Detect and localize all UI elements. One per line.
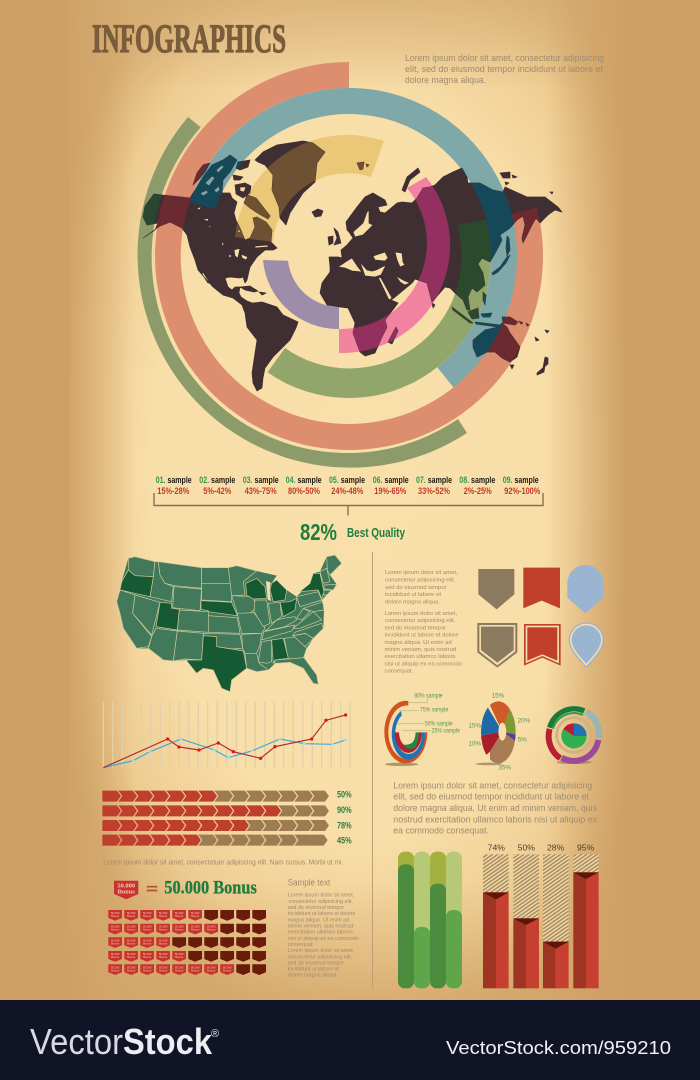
blue series xyxy=(103,738,347,768)
sample 07 xyxy=(416,475,452,497)
bar row 78% xyxy=(102,820,329,831)
red filled badges: Bonus xyxy=(127,914,136,918)
sample 08 xyxy=(459,475,495,497)
red filled badges: 50.000 xyxy=(207,925,216,929)
badges and shields xyxy=(477,565,604,668)
red filled badges: Bonus xyxy=(127,968,136,972)
sample text block: consectetur adipisicing elit, xyxy=(288,899,353,905)
red filled badges: Bonus xyxy=(159,955,168,959)
red filled badges: 50.000 xyxy=(159,965,168,969)
vertical divider xyxy=(372,552,374,988)
sample text block: incididunt ut labore et xyxy=(288,967,339,973)
lower right text block: elit, sed do eiusmod tempor incididunt ut labore et xyxy=(393,792,590,802)
best quality callout xyxy=(300,519,405,545)
pictogram grid xyxy=(108,910,266,975)
sample text block: Lorem ipsum dolor sit amet, xyxy=(288,948,355,954)
sample text block: dolore magna aliqua. xyxy=(288,973,338,979)
red filled badges: Bonus xyxy=(159,928,168,932)
footer logo xyxy=(30,1021,219,1062)
red filled badges: Bonus xyxy=(191,928,200,932)
red filled badges: Bonus xyxy=(111,928,120,932)
sample 08: 2%-25% xyxy=(464,486,492,497)
footer bar xyxy=(0,1000,700,1080)
red filled badges: 50.000 xyxy=(175,911,184,915)
sample text block: sed do eiusmod tempor xyxy=(288,960,344,966)
column back tops xyxy=(398,852,462,988)
sample 01: 15%-28% xyxy=(157,486,190,497)
sample 05: 24%-48% xyxy=(331,486,364,497)
sample 06: 19%-65% xyxy=(374,486,407,497)
3D pie donut: 20% xyxy=(518,717,531,724)
red filled badges: Bonus xyxy=(191,914,200,918)
badge: red outlined ribbon xyxy=(524,624,561,666)
equals sign xyxy=(147,887,157,890)
intro text: elit, sed do eiusmod tempor incididunt ut labore et xyxy=(405,64,603,74)
red filled badges: Bonus xyxy=(127,928,136,932)
column 50%: 50% xyxy=(518,843,535,852)
sample text block: sed do eiusmod tempor xyxy=(288,905,344,911)
best quality callout: 82% xyxy=(300,519,337,545)
sample text block: consequat. xyxy=(288,942,314,948)
sample 02: 02. sample xyxy=(199,475,235,486)
text block: badges intro: exercitation ullamco laboris xyxy=(384,654,456,660)
footer logo: Stock xyxy=(123,1021,213,1062)
sample 09: 92%-100% xyxy=(504,486,541,497)
sample text block: exercitation ullamco laboris xyxy=(288,930,353,936)
sample 03 xyxy=(243,475,279,497)
footer logo: ® xyxy=(211,1028,219,1040)
sample text block xyxy=(288,878,359,979)
column fronts xyxy=(398,864,462,988)
red filled badges: 50.000 xyxy=(159,952,168,956)
3D arc donut: 25% sample xyxy=(432,727,460,734)
sample 07: 33%-52% xyxy=(418,486,450,497)
red filled badges: Bonus xyxy=(127,941,136,945)
sample 01 xyxy=(156,475,192,497)
red filled badges: 50.000 xyxy=(143,938,152,942)
text block: badges intro: magna aliqua. Ut enim ad xyxy=(384,640,452,646)
badge: red ribbon xyxy=(523,568,560,608)
3D arc donut: 75% sample xyxy=(420,707,449,714)
red filled badges: 50.000 xyxy=(111,952,120,956)
sample text block: nisi ut aliquip ex ea commodo xyxy=(288,936,359,942)
sample 05: 05. sample xyxy=(329,475,365,486)
sample 07: 07. sample xyxy=(416,475,452,486)
bar percentages: 78% xyxy=(337,820,352,830)
red filled badges: 50.000 xyxy=(111,965,120,969)
sample 04: 80%-50% xyxy=(288,486,320,497)
intro text: Lorem ipsum dolor sit amet, consectetur adipisicing xyxy=(405,53,604,63)
column 74% xyxy=(483,843,509,988)
dark empty badges xyxy=(172,910,266,975)
red filled badges: Bonus xyxy=(207,928,216,932)
red series xyxy=(103,713,347,768)
red filled badges: Bonus xyxy=(143,955,152,959)
icon: bonus badge xyxy=(114,881,138,899)
bar row 90% xyxy=(102,805,329,816)
red filled badges: 50.000 xyxy=(223,965,232,969)
3D pie donut: 10% xyxy=(468,741,481,748)
world map silhouette xyxy=(143,141,562,391)
badge: blue outlined drop xyxy=(569,622,604,668)
red filled badges: 50.000 xyxy=(191,925,200,929)
red filled badges: Bonus xyxy=(207,968,216,972)
text block: badges intro: incididunt ut labore et dolore xyxy=(384,633,459,639)
badge: brown shield xyxy=(478,569,514,609)
text block: badges intro: sed do eiusmod tempor xyxy=(385,585,447,591)
bar percentages xyxy=(337,790,352,845)
red filled badges: 50.000 xyxy=(143,911,152,915)
3D arc donut: 50% sample xyxy=(425,720,453,727)
text block: badges intro: consectetur adipisicing elit, xyxy=(385,618,456,624)
red filled badges: Bonus xyxy=(159,941,168,945)
3D pie donut xyxy=(468,692,531,771)
text block: badges intro: incididunt ut labore et xyxy=(385,592,441,598)
line chart xyxy=(103,702,350,768)
ring overlaps on map xyxy=(143,142,540,362)
sample text block: Sample text xyxy=(288,878,331,888)
sample 04 xyxy=(286,475,322,497)
icon: bonus badge: 50.000 xyxy=(117,882,135,890)
column 74%: 74% xyxy=(488,843,505,852)
red filled badges: 50.000 xyxy=(207,965,216,969)
red filled badges: 50.000 xyxy=(143,952,152,956)
green column chart xyxy=(398,852,462,988)
legend bracket xyxy=(154,493,543,516)
red filled badges: Bonus xyxy=(175,968,184,972)
column 95%: 95% xyxy=(577,843,594,852)
USA choropleth map xyxy=(117,555,342,692)
column 28% xyxy=(543,843,569,988)
text block: badges intro xyxy=(384,570,463,675)
red filled badges: 50.000 xyxy=(127,938,136,942)
sample 03: 03. sample xyxy=(243,475,279,486)
text block: badges intro: consectetur adipisicing elit, xyxy=(385,578,456,584)
sample 04: 04. sample xyxy=(286,475,322,486)
red filled badges: 50.000 xyxy=(159,938,168,942)
red filled badges: Bonus xyxy=(143,914,152,918)
bar percentages: 45% xyxy=(337,835,352,845)
intro text xyxy=(405,53,604,85)
red filled badges: 50.000 xyxy=(175,952,184,956)
red filled badges: 50.000 xyxy=(111,925,120,929)
lower right text block: dolore magna aliqua. Ut enim ad minim veniam, quis xyxy=(393,803,598,813)
red filled badges: Bonus xyxy=(111,955,120,959)
red filled badges: Bonus xyxy=(111,914,120,918)
ring and pie donut xyxy=(549,709,599,764)
red filled badges: Bonus xyxy=(111,941,120,945)
text block: badges intro: nisi ut aliquip ex ea commodo xyxy=(384,661,463,667)
column 95% xyxy=(573,843,599,988)
badge: brown outlined shield xyxy=(477,623,517,668)
chevron progress bars xyxy=(102,790,352,846)
sample 08: 08. sample xyxy=(459,475,495,486)
red filled badges: Bonus xyxy=(175,914,184,918)
3D pie donut: 5% xyxy=(518,736,527,743)
title: INFOGRAPHICS xyxy=(92,16,286,61)
red filled badges: Bonus xyxy=(143,968,152,972)
lower right text block: nostrud exercitation ullamco laboris nisi ut aliquip ex xyxy=(393,814,598,824)
red filled badges: Bonus xyxy=(127,955,136,959)
red filled badges: 50.000 xyxy=(175,965,184,969)
3D pie donut: 15% xyxy=(492,692,505,699)
red filled badges: Bonus xyxy=(159,914,168,918)
3D arc donut: 80% sample xyxy=(414,692,443,699)
sample text block: incididunt ut labore et dolore xyxy=(288,911,355,917)
sample 09: 09. sample xyxy=(503,475,539,486)
bonus amount: 50.000 Bonus xyxy=(164,877,257,898)
sample 05 xyxy=(329,475,365,497)
bonus heading xyxy=(114,877,257,899)
red filled badges: 50.000 xyxy=(127,925,136,929)
red filled badges: 50.000 xyxy=(159,911,168,915)
red filled badges: Bonus xyxy=(143,941,152,945)
red filled badges: 50.000 xyxy=(159,925,168,929)
text block: badges intro: sed do eiusmod tempor xyxy=(384,625,446,631)
red filled badges: Bonus xyxy=(191,968,200,972)
red filled badges: 50.000 xyxy=(191,965,200,969)
lower right text block: ea commodo consequat. xyxy=(393,826,489,836)
red filled badges: Bonus xyxy=(175,955,184,959)
text block: badges intro: minim veniam, quis nostrud xyxy=(384,647,456,653)
red filled badges xyxy=(108,910,234,975)
column 28%: 28% xyxy=(547,843,564,852)
sample 06 xyxy=(373,475,409,497)
red filled badges: Bonus xyxy=(223,968,232,972)
red filled badges: 50.000 xyxy=(175,925,184,929)
red filled badges: Bonus xyxy=(111,968,120,972)
donut charts xyxy=(384,692,599,771)
sample 09 xyxy=(503,475,541,497)
intro text: dolore magna aliqua. xyxy=(405,75,486,85)
icon: bonus badge: Bonus xyxy=(118,888,135,896)
circular world map chart xyxy=(138,62,562,468)
red filled badges: 50.000 xyxy=(127,952,136,956)
sample legend row xyxy=(156,475,541,497)
red filled badges: 50.000 xyxy=(111,938,120,942)
red filled badges: 50.000 xyxy=(191,911,200,915)
red filled badges: Bonus xyxy=(175,928,184,932)
lower right text block: Lorem ipsum dolor sit amet, consectetur adipisicing xyxy=(393,780,592,790)
bars caption: Lorem ipsum dolor sit amet, consectetuer adipiscing elit. Nam cursus. Morbi ut mi. xyxy=(103,859,343,866)
3D arc donut xyxy=(384,692,460,766)
3D pie donut: 35% xyxy=(498,764,511,771)
sample text block: minim veniam, quis nostrud xyxy=(288,924,353,930)
ring arcs xyxy=(138,62,543,468)
sample 01: 01. sample xyxy=(156,475,192,486)
red filled badges: 50.000 xyxy=(143,925,152,929)
3D pie donut: 15% xyxy=(468,723,481,730)
sample 03: 43%-75% xyxy=(245,486,277,497)
text block: badges intro: dolore magna aliqua. xyxy=(385,600,440,606)
sample 02 xyxy=(199,475,235,497)
best quality callout: Best Quality xyxy=(347,526,405,540)
red filled badges: 50.000 xyxy=(111,911,120,915)
bar percentages: 50% xyxy=(337,790,352,800)
sample 02: 5%-42% xyxy=(203,486,232,497)
text block: badges intro: Lorem ipsum dolor sit amet, xyxy=(385,570,458,576)
red filled badges: 50.000 xyxy=(127,911,136,915)
red hatched column chart xyxy=(483,843,599,988)
footer logo: Vector xyxy=(30,1021,123,1062)
column 50% xyxy=(513,843,539,988)
sample 06: 06. sample xyxy=(373,475,409,486)
text block: badges intro: consequat. xyxy=(384,669,414,675)
lower right text block xyxy=(393,780,598,836)
sample text block: consectetur adipisicing elit, xyxy=(288,954,353,960)
red filled badges: 50.000 xyxy=(143,965,152,969)
sample text block: Lorem ipsum dolor sit amet, xyxy=(288,893,355,899)
bar row 45% xyxy=(102,835,328,846)
footer reference: VectorStock.com/959210 xyxy=(446,1038,671,1058)
text block: badges intro: Lorem ipsum dolor sit amet, xyxy=(384,611,458,617)
red filled badges: 50.000 xyxy=(127,965,136,969)
red filled badges: Bonus xyxy=(159,968,168,972)
badge: blue drop xyxy=(567,565,604,613)
sample text block: magna aliqua. Ut enim ad xyxy=(288,917,349,923)
red filled badges: Bonus xyxy=(143,928,152,932)
bar percentages: 90% xyxy=(337,805,352,815)
bar row 50% xyxy=(102,791,329,802)
